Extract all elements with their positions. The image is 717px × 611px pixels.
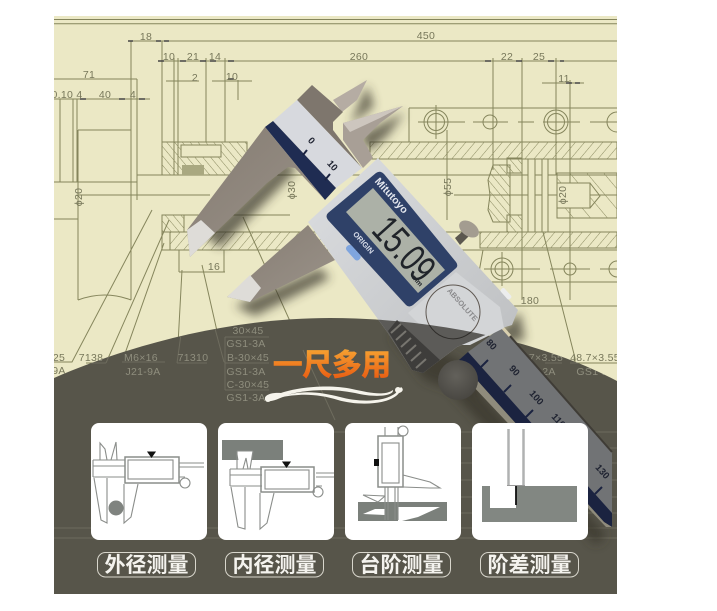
thumb screw: [455, 220, 479, 245]
card: height difference measurement: [472, 423, 588, 540]
absolute badge: [408, 272, 512, 345]
drawing remnants inside the dark area: M6×16: [124, 352, 158, 364]
technical drawing lines: 0.10 4: [52, 89, 82, 101]
technical drawing lines: 10: [163, 51, 175, 63]
main beam: 130: [593, 462, 611, 482]
drawing remnants inside the dark area: 7138: [79, 352, 103, 364]
main beam: 0: [305, 135, 317, 147]
caliper body: [308, 158, 518, 373]
technical drawing lines: [52, 20, 627, 377]
main beam: [265, 100, 612, 527]
pill label: outer diameter: 外径测量: [104, 554, 188, 577]
dark curved lower area: [54, 318, 617, 594]
lcd surround: [326, 172, 457, 306]
drawing remnants inside the dark area: 9A: [52, 365, 66, 377]
brand name: Mitutoyo: [372, 176, 410, 216]
drawing remnants inside the dark area: 7×3.55: [529, 352, 563, 364]
origin label: ORIGIN: [351, 230, 376, 256]
title: 一尺多用: [273, 349, 391, 382]
technical drawing lines: 9A: [52, 365, 66, 377]
lcd screen: [346, 188, 445, 293]
main beam: 100: [527, 388, 545, 408]
drawing remnants inside the dark area: J21-9A: [125, 366, 161, 378]
technical drawing lines: 18: [140, 31, 152, 43]
origin button: [346, 244, 361, 260]
drawing remnants inside the dark area: B-30×45: [227, 352, 269, 364]
icon: caliper measuring inside block: [222, 440, 334, 529]
technical drawing lines: ϕ20: [557, 186, 569, 204]
body below the curve, darkened: [378, 320, 486, 373]
drawing remnants inside the dark area: 48.7×3.55: [570, 352, 620, 364]
icon: rod in stepped block: [482, 429, 577, 522]
panel: blueprint background: [52, 16, 627, 594]
technical drawing lines: 16: [208, 261, 220, 273]
icon: caliper measuring round bar: [93, 442, 204, 523]
absolute badge: ABSOLUTE: [445, 286, 480, 323]
technical drawing lines: 10: [226, 71, 238, 83]
pill label: height difference: 阶差测量: [488, 553, 572, 577]
technical drawing lines: 11: [558, 73, 570, 85]
drawing remnants inside the dark area: 71310: [178, 352, 208, 364]
technical drawing lines: ϕ30: [286, 181, 298, 199]
drawing remnants inside the dark area: GS1-3A: [226, 338, 266, 350]
decorative swash under title: [265, 386, 403, 404]
caliper shadow: [205, 85, 606, 545]
lcd reading: 15.09: [363, 208, 444, 291]
technical drawing lines: 21: [187, 51, 199, 63]
technical drawing lines: 25: [53, 352, 65, 364]
locking knob: [438, 360, 478, 400]
technical drawing lines: 40: [99, 89, 111, 101]
card: outer diameter measurement: [91, 423, 207, 540]
technical drawing lines: 4: [130, 89, 136, 101]
technical drawing lines: 22: [501, 51, 513, 63]
technical drawing lines: 180: [521, 295, 539, 307]
card: step measurement: [345, 423, 461, 540]
technical drawing lines: 260: [350, 51, 368, 63]
upper jaws: [333, 80, 403, 168]
digital caliper: [187, 80, 612, 545]
main beam: 90: [506, 363, 522, 379]
technical drawing lines: 450: [417, 30, 435, 42]
main beam: 10: [324, 158, 340, 174]
pill label: step: 台阶测量: [360, 553, 444, 577]
drawing remnants inside the dark area: 25: [53, 352, 65, 364]
drawing remnants inside the dark area: [52, 310, 620, 538]
pill label: inner diameter: 内径测量: [232, 554, 316, 577]
technical drawing lines: 14: [209, 51, 221, 63]
main beam: 80: [483, 337, 499, 353]
technical drawing lines: 71: [83, 69, 95, 81]
main beam: 110: [549, 412, 567, 430]
technical drawing lines: ϕ20: [73, 188, 85, 206]
beam top end: [297, 85, 362, 168]
grip: [388, 320, 440, 373]
icon: caliper measuring step: [358, 426, 447, 521]
technical drawing lines: 2: [192, 72, 198, 84]
lower moving jaw: [227, 225, 335, 302]
card: inner diameter measurement: [218, 423, 334, 540]
darkened circle arc: [428, 324, 472, 340]
infographic: caliper over technical drawing: [54, 16, 617, 594]
grip ridges: [391, 324, 426, 368]
technical drawing lines: 48.7×3.55: [570, 352, 620, 364]
drawing remnants inside the dark area: GS1-3A: [226, 392, 266, 404]
lower fixed jaw: [187, 127, 325, 257]
technical drawing lines: 25: [533, 51, 545, 63]
technical drawing lines: 7138: [79, 352, 103, 364]
drawing remnants inside the dark area: C-30×45: [227, 379, 269, 391]
lcd unit: mm: [410, 274, 424, 288]
drawing remnants inside the dark area: 30×45: [232, 325, 264, 337]
drawing remnants inside the dark area: GS1-3A: [226, 366, 266, 378]
drawing remnants inside the dark area: GS1-2A: [576, 366, 616, 378]
technical drawing lines: ϕ55: [442, 178, 454, 196]
drawing remnants inside the dark area: 2A: [542, 366, 556, 378]
